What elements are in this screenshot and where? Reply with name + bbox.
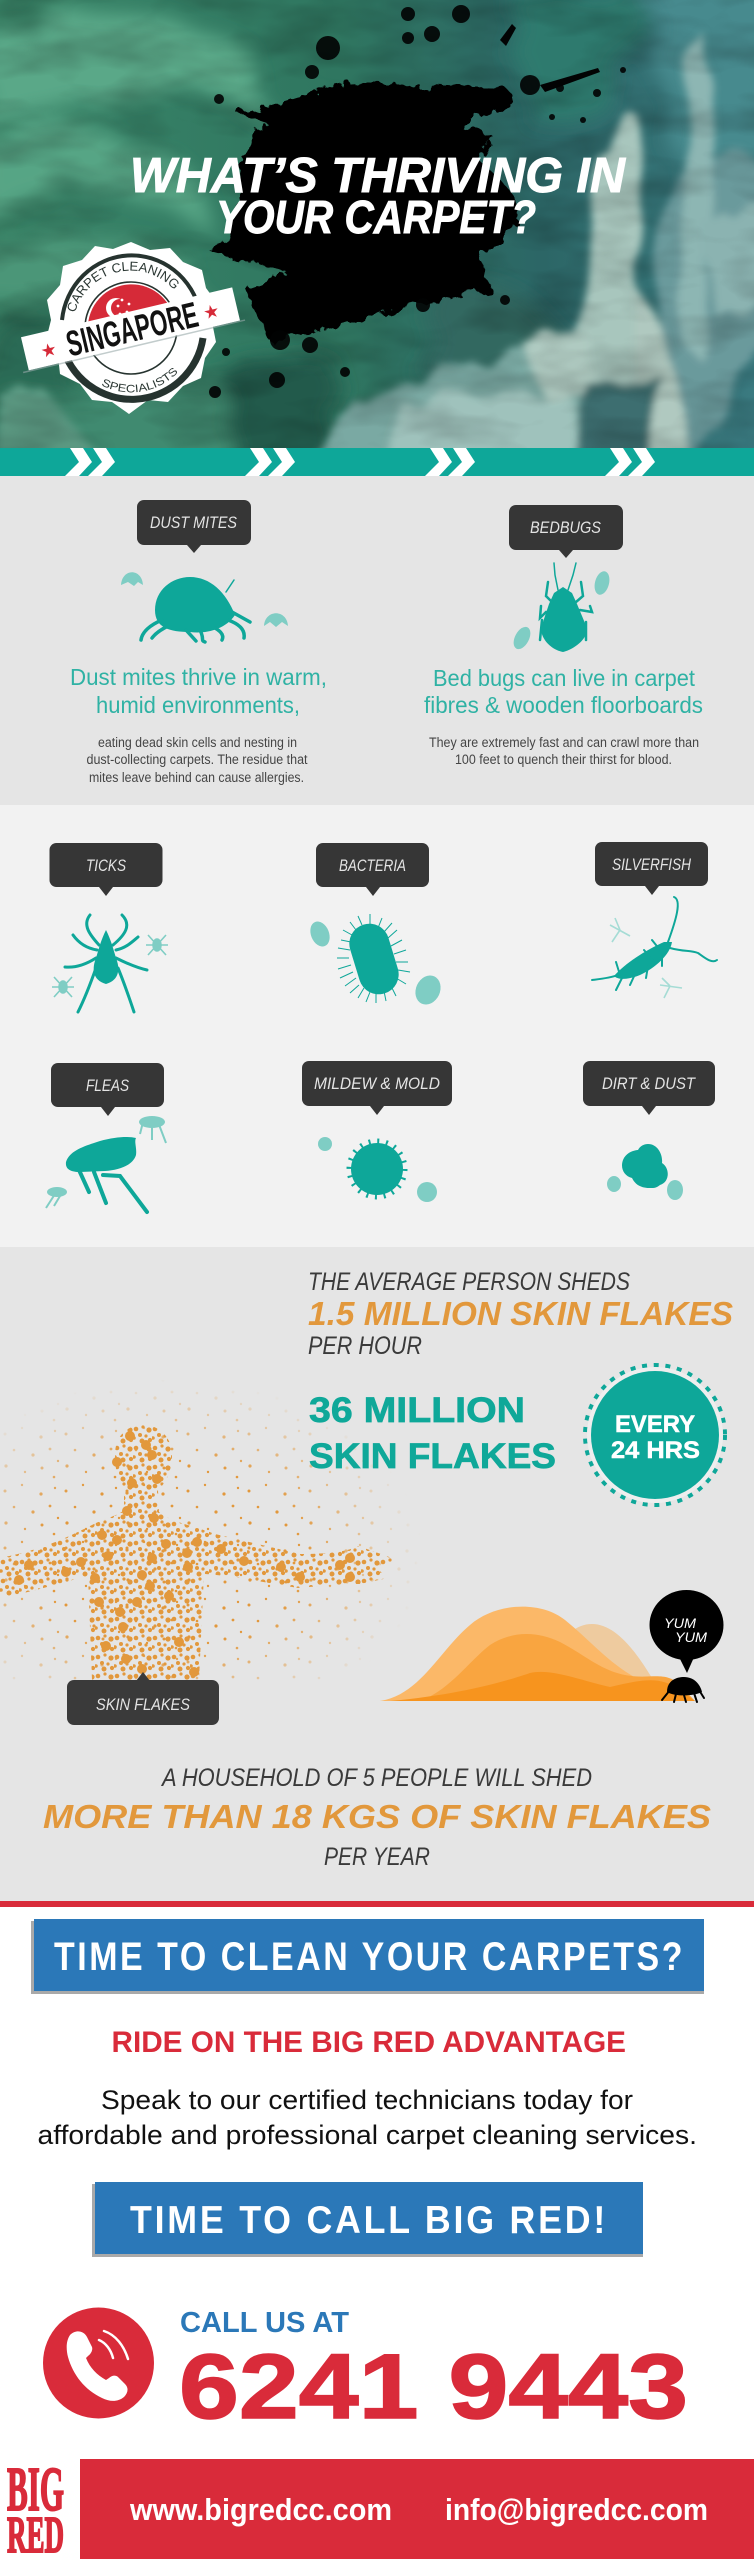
- label: fleas: [51, 1063, 164, 1116]
- illustration: mound of skin flakes: [380, 1607, 695, 1701]
- badge: every 24 hrs: 24 HRS: [611, 1437, 700, 1464]
- badge: carpet cleaning Singapore specialists: ★: [39, 339, 59, 362]
- banner: time to call: TIME TO CALL BIG RED!: [130, 2199, 608, 2242]
- label: dirt and dust: [583, 1061, 715, 1115]
- text block: household shed: [43, 1764, 711, 1871]
- panel: dust mites and bedbugs: [0, 476, 754, 805]
- stat: 36 million skin flakes: 36 MILLION: [309, 1391, 525, 1430]
- icon: dust mite: [121, 572, 288, 642]
- callout: yum yum mite: [650, 1590, 724, 1702]
- callout: yum yum mite: YUM: [664, 1615, 696, 1631]
- text block: dust mites: mites leave behind can cause allergies.: [89, 770, 304, 785]
- label: silverfish: [595, 842, 708, 895]
- heading: big red advantage: RIDE ON THE BIG RED ADVANTAGE: [112, 2026, 626, 2059]
- label: bedbugs: [509, 505, 623, 558]
- footer: contact bar: [80, 2459, 754, 2559]
- text block: household shed: PER YEAR: [324, 1843, 430, 1871]
- text block: bedbugs: They are extremely fast and can crawl more than: [429, 735, 699, 750]
- title: [133, 157, 626, 234]
- ink splatter: [209, 5, 626, 398]
- icon: bacteria: [307, 914, 445, 1009]
- title: YOUR CARPET?: [216, 191, 536, 243]
- badge: carpet cleaning Singapore specialists: [21, 242, 246, 414]
- heading: dust mites: Dust mites thrive in warm,: [70, 664, 327, 690]
- icon: bedbug: [510, 563, 612, 652]
- heading: dust mites: humid environments,: [96, 692, 300, 718]
- label: dust mites: [137, 500, 251, 553]
- footer: contact bar: www.bigredcc.com: [129, 2492, 392, 2527]
- label: skin flakes: [67, 1672, 219, 1725]
- footer: contact bar: info@bigredcc.com: [445, 2492, 708, 2527]
- icon: mildew: [318, 1137, 437, 1202]
- icon: flea: [46, 1116, 166, 1212]
- badge: carpet cleaning Singapore specialists: ★: [201, 300, 221, 323]
- label: ticks: TICKS: [86, 856, 127, 875]
- text block: speak to technicians: Speak to our certified technicians today for: [101, 2085, 633, 2115]
- panel: other carpet pests: [0, 805, 754, 1247]
- heading: bedbugs: Bed bugs can live in carpet: [433, 665, 696, 691]
- text block: speak to technicians: affordable and professional carpet cleaning services.: [38, 2120, 697, 2150]
- text block: average person sheds: THE AVERAGE PERSON SHEDS: [308, 1268, 630, 1296]
- text block: dust mites: [86, 735, 308, 785]
- panel: hero carpet photo: [0, 0, 754, 470]
- text block: bedbugs: [429, 735, 699, 767]
- panel: skin flakes: [0, 1247, 754, 1901]
- callout: yum yum mite: YUM: [675, 1629, 707, 1645]
- logo: big red: [7, 2456, 64, 2560]
- label: silverfish: SILVERFISH: [612, 855, 692, 874]
- banner: time to clean: [31, 1919, 704, 1994]
- text block: average person sheds: [308, 1268, 733, 1360]
- icon: silverfish: [592, 897, 717, 998]
- label: mildew and mold: [302, 1061, 452, 1115]
- label: fleas: FLEAS: [86, 1076, 130, 1095]
- text block: speak to technicians: [38, 2085, 697, 2150]
- heading: bedbugs: fibres & wooden floorboards: [424, 692, 703, 718]
- title: WHAT’S THRIVING IN: [130, 149, 627, 203]
- heading: dust mites: [70, 664, 327, 718]
- teal chevron band: [0, 448, 754, 476]
- text block: average person sheds: 1.5 MILLION SKIN FLAKES: [308, 1295, 733, 1332]
- icon: tick: [52, 915, 168, 1012]
- badge: every 24 hrs: [585, 1365, 725, 1505]
- label: dust mites: DUST MITES: [150, 513, 238, 532]
- red divider: [0, 1901, 754, 1907]
- label: bacteria: [316, 843, 429, 896]
- label: skin flakes: SKIN FLAKES: [96, 1695, 191, 1714]
- text: call us at: CALL US AT: [180, 2307, 349, 2339]
- stat: 36 million skin flakes: SKIN FLAKES: [309, 1437, 556, 1476]
- text block: bedbugs: 100 feet to quench their thirst for blood.: [455, 752, 672, 767]
- banner: time to call: [92, 2182, 643, 2257]
- heading: bedbugs: [424, 665, 703, 718]
- icon: phone: [43, 2308, 154, 2418]
- text: phone number: 6241 9443: [179, 2336, 688, 2438]
- text block: household shed: A HOUSEHOLD OF 5 PEOPLE WILL SHED: [160, 1764, 592, 1792]
- badge: carpet cleaning Singapore specialists: SPECIALISTS: [102, 368, 177, 392]
- label: bedbugs: BEDBUGS: [530, 518, 602, 537]
- icon: dirt: [607, 1144, 683, 1200]
- text block: dust mites: eating dead skin cells and nesting in: [98, 735, 297, 750]
- badge: carpet cleaning Singapore specialists: SINGAPORE: [62, 294, 202, 364]
- text block: dust mites: dust-collecting carpets. The residue that: [86, 752, 308, 767]
- label: dirt and dust: DIRT & DUST: [602, 1074, 696, 1093]
- label: ticks: [50, 843, 162, 896]
- text block: average person sheds: PER HOUR: [308, 1332, 422, 1360]
- badge: carpet cleaning Singapore specialists: CARPET CLEANING: [68, 262, 178, 312]
- illustration: person made of flakes: [0, 1380, 420, 1682]
- label: mildew and mold: MILDEW & MOLD: [314, 1074, 440, 1093]
- badge: every 24 hrs: EVERY: [615, 1411, 695, 1438]
- logo: big red: BIG: [7, 2456, 64, 2524]
- label: bacteria: BACTERIA: [339, 856, 406, 875]
- stat: 36 million skin flakes: [309, 1391, 556, 1476]
- text block: household shed: MORE THAN 18 KGS OF SKIN FLAKES: [43, 1798, 711, 1835]
